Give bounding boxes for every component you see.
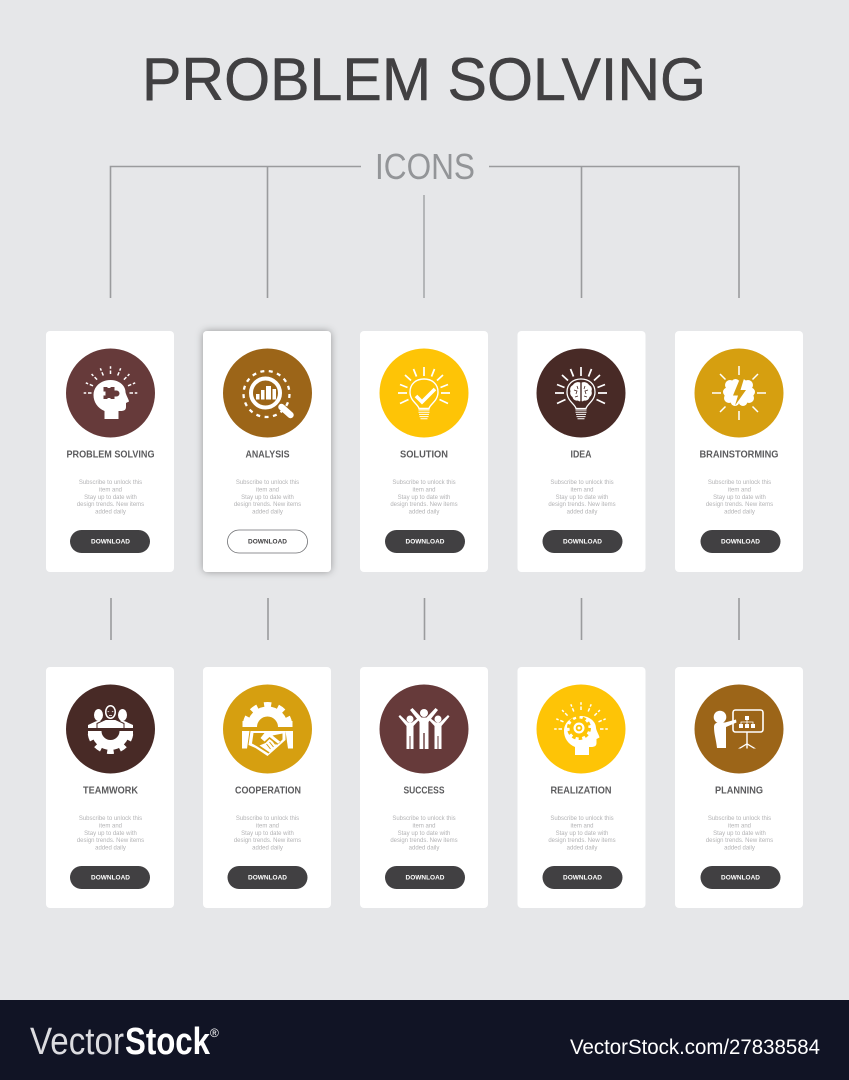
download button: DOWNLOAD: [406, 874, 445, 882]
registered mark: ®: [210, 1026, 219, 1040]
footer logo: [30, 1021, 211, 1063]
description: Stay up to date with: [84, 831, 137, 837]
panel: success: [360, 667, 488, 908]
panel: realization: [518, 667, 646, 908]
description: design trends. New items: [77, 502, 144, 508]
description: Stay up to date with: [556, 831, 608, 837]
description: added daily: [252, 510, 283, 516]
description: Subscribe to unlock this: [392, 816, 456, 822]
title: PROBLEM SOLVING: [142, 46, 706, 113]
download button: DOWNLOAD: [91, 538, 130, 546]
download button: [70, 530, 150, 553]
description: Subscribe to unlock this: [708, 480, 771, 486]
heading: TEAMWORK: [83, 786, 139, 796]
description: Subscribe to unlock this: [236, 480, 299, 486]
icon: team on gear: [66, 684, 155, 774]
description: added daily: [724, 846, 755, 852]
description: design trends. New items: [234, 502, 301, 508]
download button: DOWNLOAD: [91, 874, 130, 882]
heading: ANALYSIS: [246, 450, 290, 460]
description: design trends. New items: [234, 838, 301, 844]
icon: light bulb with check mark: [380, 348, 468, 438]
download button: [542, 866, 622, 889]
description: design trends. New items: [706, 502, 773, 508]
description: design trends. New items: [706, 838, 773, 844]
description: Subscribe to unlock this: [392, 480, 456, 486]
download button: outlined: [228, 530, 308, 553]
panel: cooperation: [203, 667, 331, 908]
description: Stay up to date with: [713, 831, 766, 837]
connector lines: top bracket: [110, 166, 739, 298]
description: Stay up to date with: [556, 495, 608, 501]
heading: SUCCESS: [404, 786, 445, 796]
heading: PLANNING: [715, 786, 763, 796]
description: Subscribe to unlock this: [79, 816, 142, 822]
heading: PROBLEM SOLVING: [66, 450, 155, 460]
panel: solution: [360, 331, 488, 572]
description: added daily: [409, 846, 439, 852]
icon: handshake under gear: [223, 684, 312, 774]
icon: magnifier with chart: [223, 348, 312, 438]
description: item and: [256, 487, 279, 493]
footer logo: Stock: [125, 1021, 211, 1063]
description: added daily: [567, 510, 597, 516]
download button: [700, 530, 780, 553]
description: item and: [99, 823, 122, 829]
description: Subscribe to unlock this: [550, 480, 614, 486]
download button: [385, 866, 465, 889]
panel: planning: [675, 667, 803, 908]
description: added daily: [95, 846, 126, 852]
download button: [542, 530, 622, 553]
panel: analysis: [203, 331, 331, 572]
download button: DOWNLOAD: [563, 874, 602, 882]
description: Stay up to date with: [398, 495, 450, 501]
description: item and: [256, 823, 279, 829]
download button: DOWNLOAD: [721, 538, 760, 546]
description: added daily: [252, 846, 283, 852]
download button: DOWNLOAD: [248, 874, 287, 882]
connector lines: between rows: [111, 598, 739, 640]
download button: DOWNLOAD: [406, 538, 445, 546]
description: Stay up to date with: [398, 831, 450, 837]
description: design trends. New items: [548, 502, 616, 508]
description: design trends. New items: [77, 838, 144, 844]
description: Subscribe to unlock this: [708, 816, 771, 822]
description: Stay up to date with: [241, 831, 294, 837]
heading: REALIZATION: [550, 786, 612, 796]
download button: [700, 866, 780, 889]
description: design trends. New items: [390, 502, 458, 508]
subtitle: icons: ICONS: [375, 146, 475, 187]
panel: brainstorming: [675, 331, 803, 572]
panel: idea: [518, 331, 646, 572]
icon: presenter with org chart board: [694, 684, 784, 774]
download button: DOWNLOAD: [721, 874, 760, 882]
description: item and: [412, 823, 436, 829]
description: Stay up to date with: [84, 495, 137, 501]
description: item and: [570, 823, 594, 829]
description: Subscribe to unlock this: [550, 816, 614, 822]
icon: head with gear: [536, 684, 626, 774]
panel: problem solving: [46, 331, 174, 572]
footer image id: VectorStock.com/27838584: [570, 1036, 820, 1059]
icon: brain with lightning bolt: [694, 348, 784, 438]
description: item and: [570, 487, 594, 493]
icon: light bulb with brain: [536, 348, 626, 438]
description: added daily: [567, 846, 597, 852]
description: Subscribe to unlock this: [236, 816, 299, 822]
download button: DOWNLOAD: [563, 538, 602, 546]
heading: IDEA: [570, 450, 592, 460]
footer logo: Vector: [30, 1021, 124, 1063]
heading: SOLUTION: [400, 450, 448, 460]
description: item and: [728, 487, 751, 493]
icon: head with puzzle piece: [66, 348, 155, 438]
heading: COOPERATION: [235, 786, 301, 796]
description: added daily: [95, 510, 126, 516]
description: Stay up to date with: [713, 495, 766, 501]
description: item and: [412, 487, 436, 493]
heading: BRAINSTORMING: [700, 450, 779, 460]
download button: [70, 866, 150, 889]
description: item and: [99, 487, 122, 493]
description: design trends. New items: [390, 838, 458, 844]
panel: teamwork: [46, 667, 174, 908]
footer bar: [0, 1000, 849, 1080]
description: added daily: [409, 510, 439, 516]
description: Subscribe to unlock this: [79, 480, 142, 486]
download button: outlined: DOWNLOAD: [248, 538, 287, 546]
description: item and: [728, 823, 751, 829]
description: added daily: [724, 510, 755, 516]
download button: [228, 866, 308, 889]
description: Stay up to date with: [241, 495, 294, 501]
icon: three people cheering: [380, 684, 468, 774]
download button: [385, 530, 465, 553]
description: design trends. New items: [548, 838, 616, 844]
